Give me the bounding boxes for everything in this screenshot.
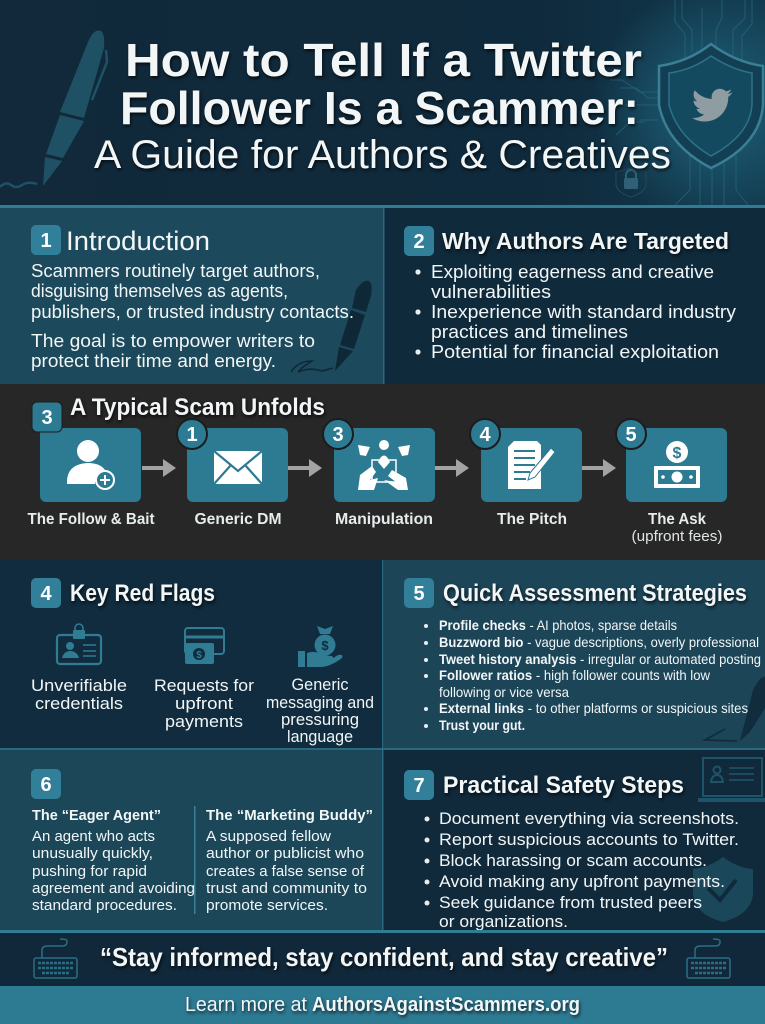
bullet list: vulnerabilities <box>431 282 551 302</box>
intro text: Scammers routinely target authors, <box>31 260 320 281</box>
badge 3: 3 <box>332 424 344 446</box>
heading: introduction: Introduction <box>66 226 210 256</box>
flag: generic messaging and pressuring language <box>266 626 374 746</box>
strategy list: Trust your gut. <box>439 717 525 733</box>
label: payments <box>165 712 243 731</box>
footer text: AuthorsAgainstScammers.org <box>312 994 580 1016</box>
panel: why authors are targeted <box>385 208 765 384</box>
badge 5 <box>404 578 434 608</box>
safety list: Report suspicious accounts to Twitter. <box>439 830 739 849</box>
icon: add user <box>67 440 114 489</box>
icon: bird <box>692 89 732 122</box>
icon: id badge <box>57 624 101 664</box>
icon: shield with check <box>693 857 753 922</box>
bullet list: Inexperience with standard industry <box>431 302 736 322</box>
safety list: Seek guidance from trusted peers <box>439 893 702 912</box>
persona: marketing buddy: author or publicist who <box>206 845 364 862</box>
strategy list: following or vice versa <box>439 684 569 700</box>
intro text: publishers, or trusted industry contacts. <box>31 301 354 322</box>
safety list: Block harassing or scam accounts. <box>439 851 707 870</box>
icon: card and cash: $ <box>196 650 202 661</box>
footer text: Learn more at <box>185 994 307 1016</box>
badge 2 <box>404 226 434 256</box>
label <box>154 676 254 731</box>
step 2: generic dm <box>177 419 288 528</box>
panel: practical safety steps <box>384 750 765 931</box>
strategy list: Follower ratios - high follower counts with low <box>439 667 711 683</box>
intro text: protect their time and energy. <box>31 350 276 371</box>
panel: quick assessment strategies <box>384 560 765 748</box>
heading: practical safety steps: Practical Safety Steps <box>443 772 684 799</box>
badge 7 <box>404 770 434 800</box>
persona: eager agent: standard procedures. <box>32 897 177 914</box>
panel: a typical scam unfolds <box>0 384 765 560</box>
flag: unverifiable credentials <box>31 624 127 713</box>
icon: shield with twitter bird <box>659 44 763 168</box>
heading: a typical scam unfolds: A Typical Scam Unfolds <box>70 394 325 421</box>
step 4: the pitch <box>470 419 582 528</box>
icon: pen <box>705 677 765 741</box>
title: Follower Is a Scammer: <box>120 82 639 134</box>
badge 2: 2 <box>413 231 425 253</box>
panel: key red flags <box>0 560 383 748</box>
bullet list: practices and timelines <box>431 322 628 342</box>
persona: marketing buddy: promote services. <box>206 897 328 914</box>
icon: envelope <box>214 451 262 484</box>
persona: eager agent: pushing for rapid <box>32 863 147 880</box>
badge 1 <box>31 225 61 255</box>
label: credentials <box>35 694 123 713</box>
label: upfront <box>175 694 233 713</box>
icon: hands and figure <box>358 440 410 490</box>
arrow <box>582 459 616 477</box>
persona: marketing buddy: trust and community to <box>206 880 367 897</box>
persona: eager agent <box>32 807 195 914</box>
label <box>266 675 374 746</box>
safety list: Document everything via screenshots. <box>439 809 739 828</box>
label: pressuring <box>281 710 359 729</box>
arrow <box>288 459 322 477</box>
intro text: disguising themselves as agents, <box>31 280 288 301</box>
strategy list: Profile checks - AI photos, sparse details <box>439 617 677 633</box>
icon: document and pen <box>508 441 555 489</box>
title: How to Tell If a Twitter <box>125 34 642 86</box>
badge 6: 6 <box>40 774 52 796</box>
title <box>94 34 671 177</box>
badge 4: 4 <box>479 424 491 446</box>
icon: pen <box>291 281 372 372</box>
badge 1: 1 <box>186 424 198 446</box>
safety list: Avoid making any upfront payments. <box>439 872 725 891</box>
title: A Guide for Authors & Creatives <box>94 133 671 177</box>
label: messaging and <box>266 693 374 712</box>
badge 4: 4 <box>40 583 52 605</box>
badge 5: 5 <box>413 583 425 605</box>
badge 6 <box>31 769 61 799</box>
panel: introduction <box>0 208 383 384</box>
icon: laptop <box>698 758 765 800</box>
intro text: The goal is to empower writers to <box>31 330 315 351</box>
label: language <box>287 727 353 746</box>
persona: eager agent: unusually quickly, <box>32 845 153 862</box>
label: The Follow & Bait <box>28 511 155 528</box>
badge 7: 7 <box>413 775 425 797</box>
bullet list <box>415 262 736 362</box>
icon: coin and banknote: $ <box>673 445 682 462</box>
safety list <box>424 809 739 931</box>
icon: keyboard right <box>687 939 730 978</box>
footer text <box>185 994 580 1016</box>
badge 3: 3 <box>41 407 53 429</box>
label: Generic DM <box>194 511 282 528</box>
label: Generic <box>292 675 349 694</box>
badge 4 <box>31 578 61 608</box>
arrow <box>435 459 469 477</box>
icon: padlock <box>616 168 646 197</box>
label: Manipulation <box>335 511 433 528</box>
bullet list: Potential for financial exploitation <box>431 342 719 362</box>
persona: marketing buddy <box>206 807 373 914</box>
persona: marketing buddy: creates a false sense of <box>206 863 365 880</box>
icon: keyboard left <box>34 939 77 978</box>
persona: eager agent: The “Eager Agent” <box>32 807 161 824</box>
badge 5: 5 <box>625 424 637 446</box>
quote: “Stay informed, stay confident, and stay creative” <box>100 942 668 972</box>
badge 1: 1 <box>40 230 52 252</box>
label: Unverifiable <box>31 676 127 695</box>
strategy list: External links - to other platforms or suspicious sites <box>439 700 748 716</box>
intro text <box>31 260 354 371</box>
strategy list <box>424 617 761 733</box>
icon: pen <box>0 30 107 187</box>
footer <box>0 986 765 1024</box>
persona: marketing buddy: The “Marketing Buddy” <box>206 807 373 824</box>
flag: requests for upfront payments <box>154 628 254 731</box>
safety list: or organizations. <box>439 912 568 931</box>
persona: eager agent: An agent who acts <box>32 828 155 845</box>
heading: key red flags: Key Red Flags <box>70 580 215 607</box>
label: Requests for <box>154 676 254 695</box>
step 3: manipulation <box>323 419 435 528</box>
icon: money bag on hand: $ <box>321 638 329 653</box>
panel: scammer personas <box>0 750 382 930</box>
heading: why authors are targeted: Why Authors Are Targeted <box>442 228 729 254</box>
arrow <box>142 459 176 477</box>
quote banner <box>0 933 765 986</box>
header panel <box>0 0 765 205</box>
persona: marketing buddy: A supposed fellow <box>206 828 331 845</box>
bullet list: Exploiting eagerness and creative <box>431 262 714 282</box>
sub label: (upfront fees) <box>632 529 722 545</box>
persona: eager agent: agreement and avoiding <box>32 880 195 897</box>
label: The Pitch <box>497 511 567 528</box>
step 5: the ask <box>616 419 727 545</box>
label <box>31 676 127 713</box>
label: The Ask <box>648 511 706 528</box>
icon: circuit lines <box>608 0 752 205</box>
step 1: the follow and bait <box>28 402 155 528</box>
